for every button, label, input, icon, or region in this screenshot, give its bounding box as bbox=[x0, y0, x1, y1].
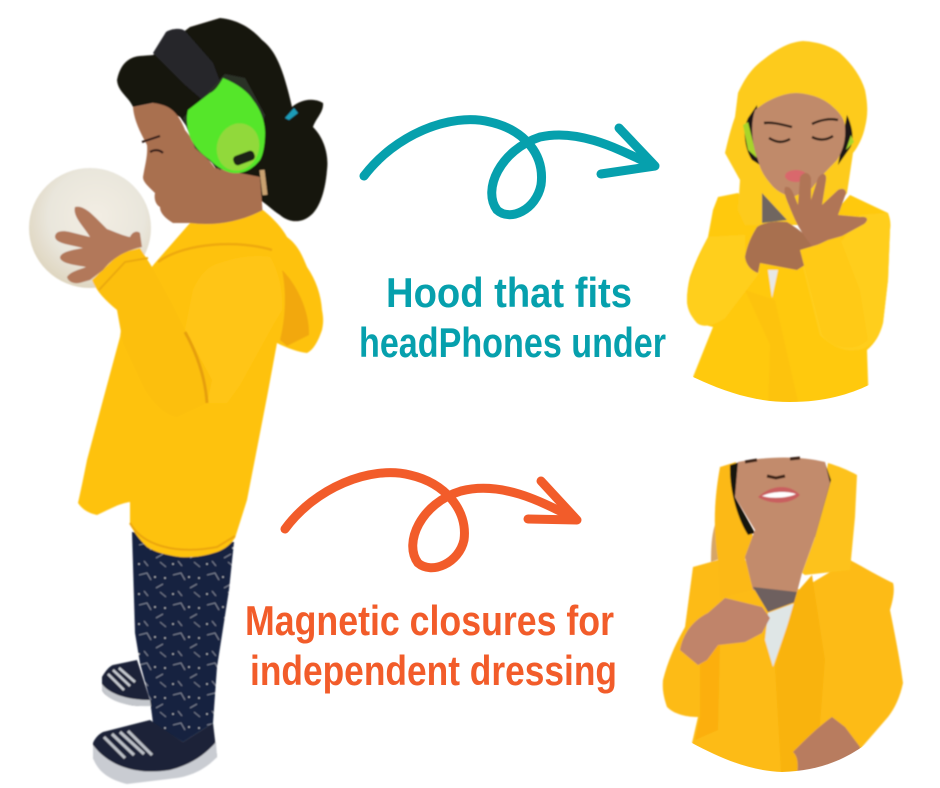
photo: hood with headphones bbox=[687, 41, 890, 410]
grey shirt bbox=[753, 587, 797, 612]
headphones and hair bbox=[745, 105, 853, 165]
upper hand bbox=[680, 598, 770, 665]
arrow: teal loop bbox=[364, 120, 655, 215]
hood bbox=[725, 41, 867, 225]
ear cups bbox=[743, 122, 854, 158]
hair tie bbox=[285, 108, 298, 120]
left hood bbox=[714, 461, 754, 562]
teeth bbox=[762, 492, 796, 498]
mouth bbox=[758, 487, 800, 503]
lower hand bbox=[745, 222, 813, 273]
forearm bbox=[92, 248, 212, 417]
shirt bbox=[762, 193, 787, 223]
eyes and brows bbox=[764, 119, 838, 142]
cuff seam bbox=[99, 258, 148, 290]
hair bbox=[730, 462, 831, 537]
upper hand bbox=[784, 173, 867, 247]
pants bbox=[132, 532, 234, 742]
logo bbox=[232, 150, 256, 166]
white tee bbox=[768, 270, 778, 298]
hem shadow bbox=[130, 523, 235, 550]
photo: magnetic closure bbox=[663, 458, 903, 788]
balloon bbox=[29, 168, 151, 288]
jacket bbox=[687, 193, 890, 410]
face and neck bbox=[735, 458, 830, 592]
body bbox=[78, 210, 323, 557]
back shoe bbox=[102, 660, 151, 706]
placket bbox=[775, 575, 825, 788]
neck and face bbox=[133, 103, 263, 230]
nose and eyes bbox=[745, 458, 800, 478]
mouth bbox=[785, 170, 807, 182]
sleeve crease bbox=[185, 332, 207, 403]
headphones bbox=[153, 29, 266, 177]
text: hood caption: headPhones under bbox=[359, 319, 666, 366]
front shoe bbox=[93, 720, 217, 784]
jacket bbox=[663, 560, 903, 788]
hoodie bbox=[78, 210, 323, 557]
hair bbox=[117, 18, 327, 221]
tan strap bbox=[710, 526, 719, 562]
text: hood caption bbox=[359, 269, 666, 366]
cup patch bbox=[210, 117, 266, 177]
left sleeve bbox=[687, 235, 760, 326]
text: hood caption: Hood that fits bbox=[386, 269, 632, 316]
right cuff bbox=[799, 238, 840, 346]
text: magnetic caption: independent dressing bbox=[250, 647, 617, 694]
text: magnetic caption: Magnetic closures for bbox=[245, 597, 614, 644]
white tee bbox=[765, 603, 795, 667]
orange shade bbox=[695, 640, 720, 740]
right hood bbox=[802, 463, 857, 575]
headband bbox=[153, 29, 222, 102]
text: magnetic caption bbox=[245, 597, 617, 694]
ear cup frame bbox=[183, 74, 265, 170]
hand bbox=[55, 207, 142, 283]
earring bbox=[262, 170, 265, 195]
right sleeve bbox=[800, 213, 890, 350]
lower hand bbox=[792, 716, 861, 771]
arrow: orange loop bbox=[285, 473, 577, 568]
hood shading bbox=[280, 270, 309, 346]
hood seam bbox=[158, 244, 272, 262]
photo: child in profile bbox=[29, 18, 327, 784]
face bbox=[752, 93, 845, 197]
eye bbox=[142, 136, 163, 153]
placket bbox=[746, 290, 747, 291]
ear cup bbox=[187, 78, 265, 173]
upper arm bbox=[185, 256, 282, 403]
